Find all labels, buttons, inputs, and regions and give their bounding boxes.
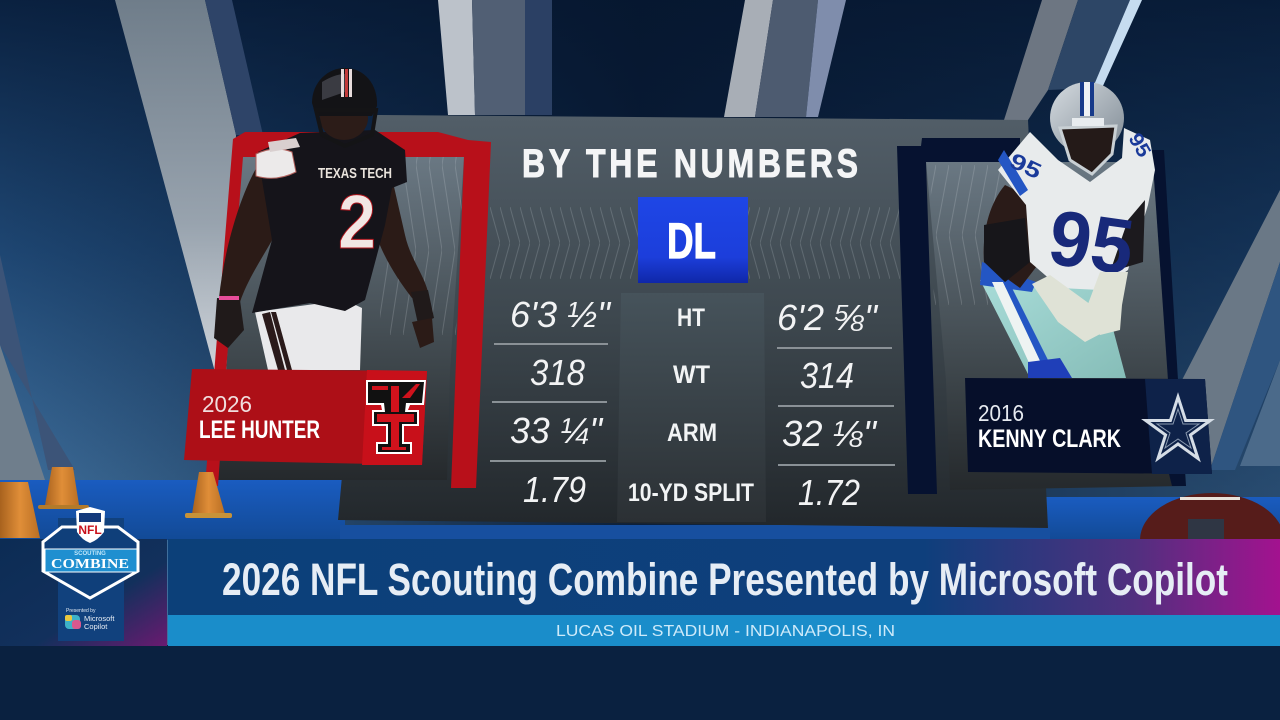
stat labels column	[617, 293, 766, 522]
football	[1140, 493, 1280, 539]
scouting combine logo: Copilot	[84, 622, 108, 631]
player: Lee Hunter: TEXAS TECH	[318, 165, 392, 182]
stage light beams	[0, 0, 1280, 480]
name and draft year: LEE HUNTER	[199, 416, 320, 444]
Lee Hunter stats	[490, 294, 612, 510]
player nameplate	[965, 378, 1212, 474]
floor	[0, 480, 1280, 540]
name and draft year	[199, 391, 320, 444]
scouting combine logo: SCOUTING	[74, 551, 106, 557]
stat labels column: HT	[677, 304, 705, 332]
NFL shield: NFL	[78, 523, 102, 537]
title: BY THE NUMBERS	[522, 141, 858, 186]
player: Lee Hunter: 2	[338, 180, 376, 265]
stat labels column: WT	[673, 361, 710, 389]
logo block background	[0, 539, 167, 646]
card inner panel	[926, 162, 1185, 490]
banner title bar	[168, 539, 1280, 615]
name and draft year: KENNY CLARK	[978, 425, 1121, 453]
Lee Hunter stats: 33 ¼"	[510, 410, 604, 451]
player: Kenny Clark: 95	[1124, 130, 1155, 161]
name and draft year: 2026	[202, 391, 252, 417]
Kenny Clark stats: 32 ⅛"	[782, 413, 878, 454]
scouting combine logo: Microsoft	[84, 614, 115, 623]
card inner panel	[218, 157, 464, 480]
scouting combine logo	[43, 507, 138, 641]
player: Lee Hunter	[214, 68, 434, 370]
player: Kenny Clark: 95	[1044, 193, 1139, 292]
training cones	[0, 467, 232, 538]
Kenny Clark stats: 6'2 ⅝"	[777, 297, 879, 338]
Kenny Clark stats: 314	[800, 355, 854, 396]
Lee Hunter stats: 1.79	[523, 469, 586, 510]
scouting combine logo: Presented by	[66, 608, 96, 614]
position badge	[638, 197, 748, 283]
player nameplate	[184, 369, 427, 465]
Lee Hunter stats: 6'3 ½"	[510, 294, 612, 335]
player: Kenny Clark	[980, 82, 1155, 378]
name and draft year	[978, 400, 1121, 453]
panel: Lee Hunter card	[184, 68, 491, 488]
card navy frame	[897, 138, 1020, 494]
position badge: DL	[667, 213, 716, 269]
icon: Copilot mark	[65, 615, 81, 629]
card red frame	[205, 132, 491, 488]
main stats panel	[338, 115, 1048, 528]
panel: Kenny Clark card	[897, 82, 1212, 494]
location bar: LUCAS OIL STADIUM - INDIANAPOLIS, IN	[556, 623, 895, 640]
stat labels column: 10-YD SPLIT	[628, 479, 754, 507]
badge shield	[43, 527, 138, 598]
chevron band	[490, 207, 900, 279]
scouting combine logo: COMBINE	[51, 557, 129, 572]
icon: Dallas Cowboys star	[1146, 397, 1210, 458]
name and draft year: 2016	[978, 400, 1024, 426]
Kenny Clark stats	[777, 297, 895, 513]
stat labels column: ARM	[667, 419, 717, 447]
Lee Hunter stats: 318	[530, 352, 585, 393]
player: Kenny Clark: 95	[1006, 148, 1045, 184]
Kenny Clark stats: 1.72	[798, 472, 860, 513]
location bar	[168, 615, 1280, 646]
icon: Texas Tech double T logo	[366, 380, 426, 454]
